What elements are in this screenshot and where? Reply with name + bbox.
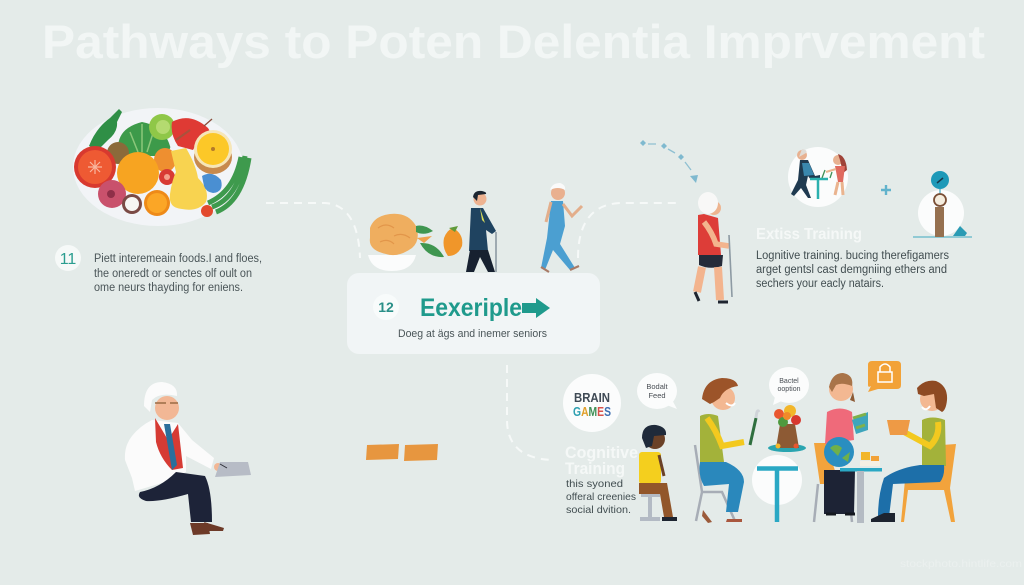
text: training description: arget gentsl cast demgniing ethers and	[756, 264, 947, 276]
text: diet description: Piett interemeain foods.I and floes,	[94, 253, 262, 265]
brown kiwi	[107, 142, 129, 164]
large orange	[117, 152, 159, 194]
icon: brain games badge: BRAIN	[574, 390, 610, 405]
step 11 badge	[55, 245, 81, 271]
leafy greens	[118, 122, 170, 156]
illustration: man with cane	[466, 191, 496, 272]
green pepper	[89, 109, 122, 150]
speech bubble: social option	[769, 367, 809, 405]
arrow	[522, 298, 550, 318]
heading: cognitive training: Cognitive	[565, 443, 638, 462]
green beans	[208, 156, 249, 212]
icon: orange blocks	[366, 444, 438, 461]
illustration: fruit centrepiece	[768, 405, 806, 452]
illustration: standing woman with globe	[814, 373, 868, 522]
text: diet description: the oneredt or senctes olf oult on	[94, 268, 252, 280]
illustration: brain and fruit bowl	[368, 214, 462, 271]
speech bubble: social option: ooption	[778, 386, 801, 393]
illustration: seated person with tablet	[871, 381, 956, 522]
text: social description: this syoned	[566, 478, 623, 490]
illustration: people at table in circle	[788, 147, 848, 207]
red cherry tomato	[159, 169, 175, 185]
illustration: seated child	[639, 425, 677, 521]
text: training description	[756, 250, 949, 290]
text: training description: sechers your eacly natairs.	[756, 278, 884, 290]
citrus half	[194, 140, 232, 174]
heading: cognitive training: Training	[565, 459, 625, 478]
heading: exercise: Eexeriple	[420, 294, 522, 322]
illustration: food plate	[73, 108, 249, 226]
red berry	[201, 205, 213, 217]
panel: exercise	[347, 273, 600, 354]
mangosteen	[122, 194, 142, 214]
text: social description: offeral creenies	[566, 491, 636, 503]
arrow: blue dotted	[640, 140, 698, 183]
speech bubble: brain food: Bodalt	[646, 382, 669, 391]
icon: orange lock bubble	[868, 361, 901, 392]
text: social description: social dvition.	[566, 504, 631, 516]
text: social description	[566, 478, 636, 516]
illustration: seated doctor	[125, 382, 251, 535]
apple	[172, 118, 210, 150]
blue fruit	[202, 174, 222, 193]
illustration: small table with cups	[840, 452, 882, 523]
subtext: Doeg at ägs and inemer seniors	[398, 328, 547, 340]
speech bubble: social option: Bactel	[779, 378, 799, 385]
panel: exercise: 12	[378, 299, 394, 315]
speech bubble: brain food	[637, 373, 677, 409]
illustration: older woman with walking stick	[695, 192, 732, 302]
text: diet description	[94, 253, 262, 294]
text: training description: Lognitive training. bucing therefigamers	[756, 250, 949, 262]
heading: cognitive training	[565, 443, 638, 478]
step 11 badge: 11	[60, 251, 76, 268]
text: diet description: ome neurs thayding for eniens.	[94, 282, 243, 294]
icon: brain games badge	[563, 374, 621, 432]
watermark: stockphoto.hintlife.com	[900, 559, 1022, 570]
icon: brain games badge: GAMES	[573, 404, 611, 419]
icon: exercise tracker	[913, 171, 972, 237]
pink fruit	[98, 180, 126, 208]
squash	[170, 148, 207, 210]
illustration: walking woman in blue	[541, 183, 582, 272]
illustration: teal table with white circle	[752, 455, 802, 522]
speech bubble: brain food: Feed	[648, 391, 666, 400]
connector: centre to walking woman	[578, 203, 680, 258]
tomato slice	[74, 146, 116, 188]
step 12 badge	[373, 294, 399, 320]
connector: food to centre	[266, 203, 360, 258]
kiwi	[149, 114, 175, 140]
illustration: seated woman with spoon	[695, 378, 759, 523]
heading: extiss training: Extiss Training	[756, 226, 862, 243]
orange slice	[144, 190, 170, 216]
orange carrot	[154, 148, 176, 172]
title: Pathways to Poten Delentia Imprvement	[42, 15, 985, 68]
icon: plus	[881, 185, 891, 195]
connector: centre to social group	[507, 365, 552, 460]
